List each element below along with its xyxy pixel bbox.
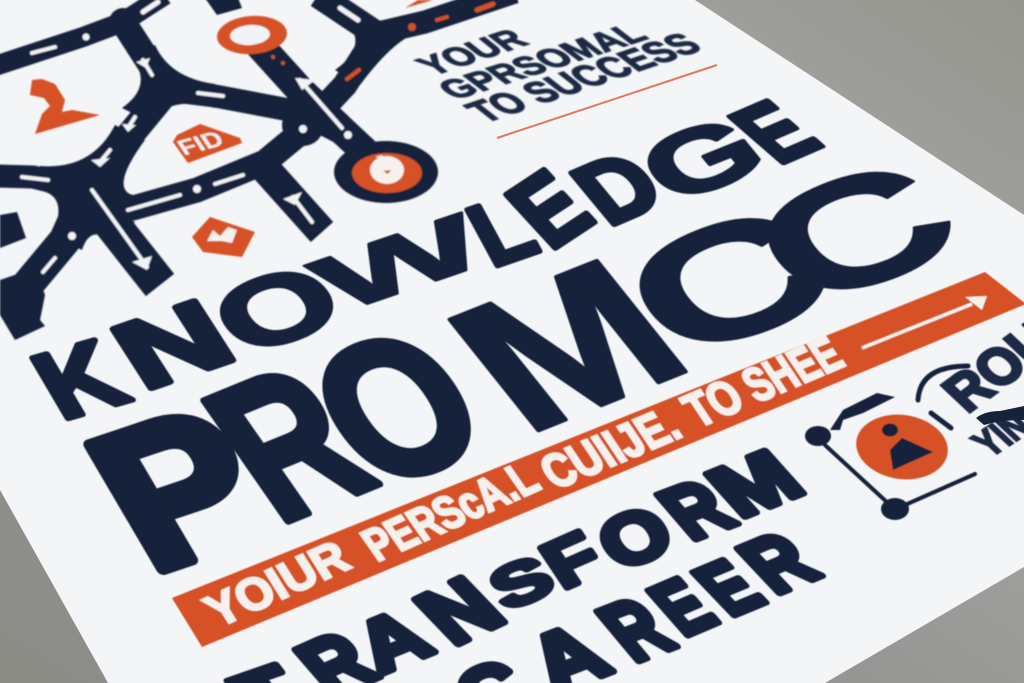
icon: orange hexagon crown xyxy=(192,217,255,257)
icon: orange tag: FID xyxy=(173,127,229,160)
icon: orange tag xyxy=(173,124,242,163)
banner arrow xyxy=(862,296,987,348)
subtitle line: CAREER: R xyxy=(721,518,837,609)
subtitle line: TRANSFORM xyxy=(216,436,821,683)
title line: KNOWLEDGE: E xyxy=(487,151,613,268)
subtitle line: TRANSFORM: O xyxy=(582,489,688,586)
title line: PRO MCC: O xyxy=(272,287,523,530)
title line: KNOWLEDGE: G xyxy=(618,98,786,221)
title line: KNOWLEDGE: K xyxy=(15,320,145,439)
roads xyxy=(0,0,515,340)
icon: orange person on stand xyxy=(30,79,100,134)
tagline heading xyxy=(408,18,712,129)
banner text: SHEE xyxy=(732,327,853,413)
subtitle line: CAREER: E xyxy=(631,562,733,651)
banner text: TO xyxy=(673,369,754,437)
orange banner xyxy=(172,272,1024,647)
person glyph xyxy=(882,424,933,470)
road markings xyxy=(22,2,358,272)
title line: KNOWLEDGE: L xyxy=(452,177,552,286)
subtitle line: TRANSFORM: S xyxy=(478,543,565,623)
subtitle line: TRANSFORM: R xyxy=(641,465,751,555)
title line: PRO MCC: M xyxy=(408,220,727,470)
title line: KNOWLEDGE xyxy=(15,85,842,439)
icon: small orange mark at top xyxy=(405,0,433,8)
title line: PRO MCC xyxy=(55,126,997,612)
subtitle line: TRANSFORM: M xyxy=(690,436,821,533)
banner shape xyxy=(172,272,1024,647)
road map illustration xyxy=(0,0,515,340)
title line: KNOWLEDGE: N xyxy=(93,280,253,410)
subtitle line: TRANSFORM: N xyxy=(397,561,523,660)
frame lines and nodes xyxy=(805,393,975,520)
banner text: YOIUR xyxy=(195,530,358,637)
banner text: PERScA.L xyxy=(352,453,549,571)
subtitle line: CAREER: R xyxy=(581,582,692,679)
title line: PRO MCC: C xyxy=(585,172,873,393)
icon: destination node xyxy=(334,141,438,203)
title line: KNOWLEDGE: D xyxy=(553,134,683,244)
orange road dashes xyxy=(271,4,493,79)
route icon label smudge xyxy=(976,406,1024,425)
title line: KNOWLEDGE: W xyxy=(295,198,506,329)
orange badge xyxy=(852,409,952,485)
title line: KNOWLEDGE: O xyxy=(188,242,365,375)
title line: PRO MCC: R xyxy=(168,324,408,562)
title line: PRO MCC: C xyxy=(713,126,997,338)
subtitle line: TRANSFORM: F xyxy=(528,519,616,603)
title line: KNOWLEDGE: E xyxy=(709,85,842,180)
title line: PRO MCC: P xyxy=(55,367,305,612)
arc and tick xyxy=(918,366,968,428)
subtitle line: CAREER xyxy=(440,518,837,683)
banner text: CUIIJE. xyxy=(530,398,691,499)
route icon with person badge xyxy=(805,366,975,520)
tagline line 3: TO SUCCESS xyxy=(457,27,712,129)
orange rule under tagline xyxy=(497,65,717,138)
icon: orange ring node xyxy=(216,14,288,56)
banner text xyxy=(195,327,853,637)
tagline line 2: GPRSOMAL xyxy=(428,18,656,105)
tagline line 1: YOUR xyxy=(408,24,536,81)
subtitle line: CAREER: E xyxy=(676,545,781,630)
